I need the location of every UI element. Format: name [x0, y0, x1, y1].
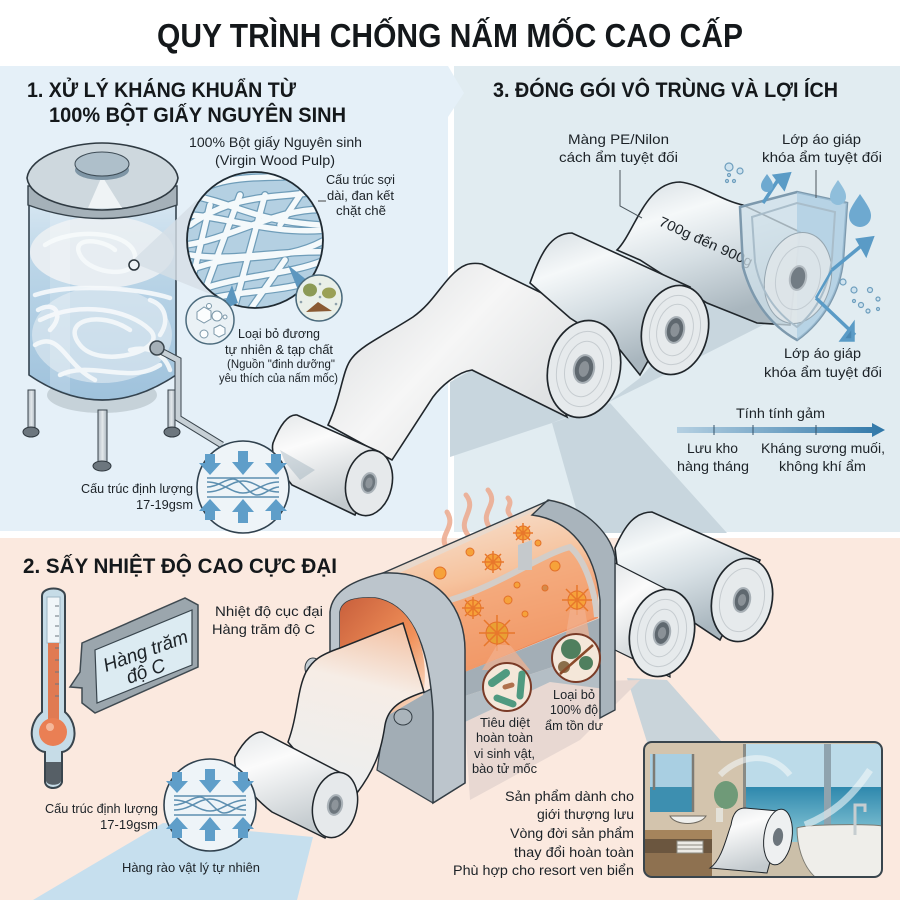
- label: gsm structure bottom: 17-19gsm: [100, 818, 158, 832]
- label: armour top: Lớp áo giáp: [782, 131, 861, 147]
- title: QUY TRÌNH CHỐNG NẤM MỐC CAO CẤP: [157, 16, 743, 54]
- label: remove moisture: Loại bỏ: [553, 688, 595, 702]
- label: gsm structure bottom: Cấu trúc định lượng: [45, 802, 158, 816]
- callout sign: Hàng trăm: [101, 627, 191, 677]
- label: kill microbes: vi sinh vật,: [474, 747, 535, 761]
- benefits text: Vòng đời sản phẩm: [510, 825, 634, 841]
- scale arrow: durability: [677, 405, 885, 474]
- bacteria circle: [482, 645, 531, 711]
- label: remove sugars: Loại bỏ đương: [238, 327, 320, 341]
- shadow to bathroom: [627, 678, 722, 742]
- label: fibre structure: Cấu trúc sợi: [326, 173, 395, 187]
- paper roll A: [615, 563, 702, 683]
- label: remove sugars: tự nhiên & tạp chất: [225, 343, 334, 357]
- thermometer: [32, 588, 75, 788]
- label: fibre structure: [318, 173, 395, 218]
- label: armour top: [762, 131, 882, 198]
- label: remove moisture: [545, 688, 603, 733]
- panel: step 3 background: [454, 66, 900, 532]
- oven stars: [434, 526, 586, 644]
- label: virgin pulp: 100% Bột giấy Nguyên sinh: [189, 134, 362, 150]
- cone to magnifier: [131, 200, 220, 298]
- bubbles: [725, 163, 880, 313]
- label: armour bottom: khóa ẩm tuyệt đối: [764, 364, 882, 380]
- label: PE film: [559, 131, 678, 165]
- label: virgin pulp: [189, 134, 362, 168]
- sampling point: [129, 260, 139, 270]
- roll end step 2: [307, 768, 363, 842]
- step 3 heading: 3. ĐÓNG GÓI VÔ TRÙNG VÀ LỢI ÍCH: [493, 78, 838, 102]
- benefits text: [453, 788, 634, 878]
- callout sign: [70, 598, 198, 713]
- roll face 2: [633, 279, 717, 381]
- label: armour bottom: [764, 345, 882, 380]
- label: gsm structure top: 17-19gsm: [136, 498, 193, 512]
- resort bathroom scene: [644, 742, 882, 877]
- scale arrow: durability: không khí ẩm: [779, 458, 866, 474]
- panel: step 2 background: [0, 538, 900, 900]
- heat waves: [444, 490, 510, 548]
- label: kill microbes: [472, 716, 537, 776]
- label: remove sugars: yêu thích của nấm mốc): [219, 373, 338, 385]
- label: armour top: khóa ẩm tuyệt đối: [762, 149, 882, 165]
- label: kill microbes: bào tử mốc: [472, 762, 537, 776]
- callout sign: độ C: [124, 655, 169, 689]
- leader line: [620, 170, 642, 218]
- weight label: 700g đến 900g: [657, 213, 755, 270]
- foil roll 2: [530, 233, 690, 375]
- callout pointers: [222, 265, 308, 310]
- label: PE film: cách ẩm tuyệt đối: [559, 149, 678, 165]
- benefits text: Sản phẩm dành cho: [505, 788, 634, 804]
- icon: sugar circle: [186, 296, 234, 344]
- scale arrow: durability: Tính tính gảm: [736, 405, 825, 421]
- label: max temperature: Nhiệt độ cục đại: [215, 603, 323, 619]
- panel: step 1 background with chevron: [0, 66, 464, 531]
- tank with pulp: [23, 143, 222, 471]
- step 1 heading: 1. XỬ LÝ KHÁNG KHUẨN TỪ: [27, 78, 297, 102]
- roll face 1: [539, 314, 629, 424]
- label: max temperature: Hàng trăm độ C: [212, 621, 315, 637]
- benefits text: giới thượng lưu: [537, 806, 634, 822]
- label: natural barrier: Hàng rào vật lý tự nhiên: [122, 861, 260, 875]
- roller axle: [305, 658, 412, 725]
- label: gsm structure bottom: [45, 802, 158, 832]
- deflected arrows: [763, 174, 872, 340]
- roll end lower-left: [340, 446, 398, 520]
- step 1 heading: 100% BỘT GIẤY NGUYÊN SINH: [49, 103, 346, 127]
- label: gsm structure top: Cấu trúc định lượng: [81, 482, 193, 496]
- oven front arch: [330, 573, 465, 803]
- scale arrow: durability: Lưu kho: [687, 440, 738, 456]
- flow shadows: [450, 303, 767, 533]
- foil roll B: [615, 512, 780, 647]
- label: virgin pulp: (Virgin Wood Pulp): [215, 152, 335, 168]
- roll shadow: [280, 450, 315, 480]
- label: fibre structure: chặt chẽ: [336, 204, 386, 218]
- oven base block: [377, 672, 465, 803]
- label: fibre structure: dài, đan kết: [327, 189, 395, 203]
- label: kill microbes: Tiêu diệt: [480, 716, 531, 730]
- compression circle top: [197, 441, 289, 533]
- icon: impurities circle: [296, 275, 342, 321]
- benefits text: thay đổi hoàn toàn: [514, 844, 634, 860]
- scale arrow: durability: Kháng sương muối,: [761, 440, 885, 456]
- ribbon to packaged roll: [328, 263, 593, 460]
- hot ribbon: [288, 623, 424, 793]
- label: max temperature: [212, 603, 323, 637]
- label: armour bottom: Lớp áo giáp: [784, 345, 861, 361]
- label: PE film: Màng PE/Nilon: [568, 131, 669, 147]
- oven: roof and interior: [383, 500, 615, 722]
- label: kill microbes: hoàn toàn: [476, 731, 533, 745]
- water drops: [761, 174, 871, 227]
- label: remove sugars: [219, 327, 338, 385]
- magnifier: fibres: [185, 172, 330, 310]
- shadow to barrier: [33, 823, 313, 900]
- scale arrow: durability: hàng tháng: [677, 458, 749, 474]
- benefits text: Phù hợp cho resort ven biển: [453, 862, 634, 878]
- label: remove moisture: ẩm tồn dư: [545, 719, 603, 733]
- roll body lower-left: [272, 415, 380, 515]
- step 1 heading: [27, 78, 346, 127]
- roll body step 2: [235, 732, 345, 838]
- compression circle bottom: [164, 759, 256, 851]
- label: gsm structure top: [81, 482, 193, 512]
- label: remove sugars: (Nguồn "đinh dưỡng": [227, 359, 335, 371]
- oven floor shadow: [465, 680, 640, 800]
- step 2 heading: 2. SẤY NHIỆT ĐỘ CAO CỰC ĐẠI: [23, 554, 337, 578]
- label: remove moisture: 100% độ: [550, 703, 598, 717]
- shield with roll: [740, 192, 847, 340]
- foil roll 3 behind shield: [617, 182, 800, 325]
- mould circle: [552, 610, 600, 682]
